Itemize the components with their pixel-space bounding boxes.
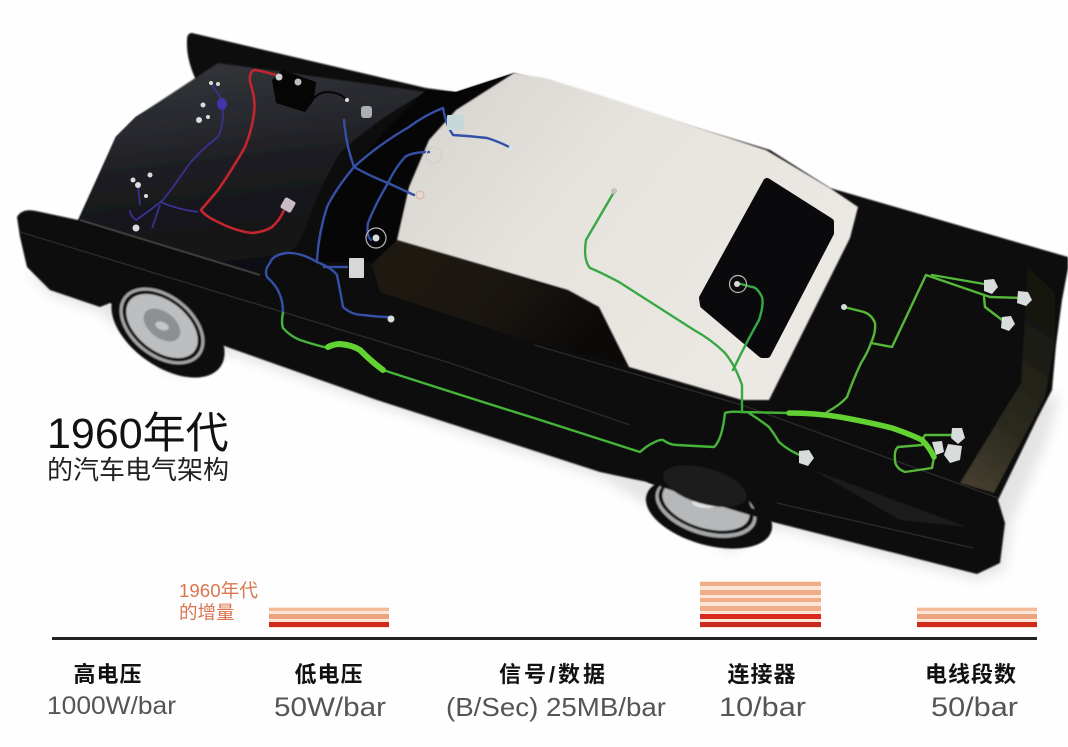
axis line — [52, 637, 1037, 640]
column: signal and data — [446, 662, 666, 722]
right rear panel — [960, 267, 1055, 493]
bars: low voltage — [269, 607, 389, 628]
rear window frame — [317, 73, 514, 262]
green harness — [282, 192, 1024, 472]
column: signal and data: 信号/数据 — [499, 662, 605, 687]
thick green trunks — [328, 344, 934, 457]
rear-left rim — [105, 272, 219, 380]
title line 1: 1960年代 — [47, 410, 229, 458]
side window glass — [372, 240, 627, 365]
illustration: 1960s car with wiring — [17, 33, 1068, 580]
legend note: 1960s amount: 1960年代 — [179, 580, 259, 601]
bars: wire segments — [917, 607, 1037, 628]
column: low voltage: 50W/bar — [274, 692, 386, 722]
column: signal and data: (B/Sec) 25MB/bar — [446, 692, 666, 722]
column: connectors: 10/bar — [719, 692, 806, 722]
rear window — [703, 182, 830, 354]
rear-left wheel — [94, 263, 242, 397]
bars: connectors — [700, 581, 821, 628]
connectors — [130, 81, 1032, 466]
white roof — [397, 73, 858, 400]
column: low voltage: 低电压 — [294, 662, 364, 687]
column: high voltage: 高电压 — [73, 662, 143, 687]
column: connectors — [719, 662, 806, 722]
red wire — [201, 70, 284, 233]
title line 2: 的汽车电气架构 — [47, 455, 229, 485]
front-right wheel arch — [647, 467, 773, 522]
title — [47, 410, 229, 485]
dark blue trunk wire — [130, 83, 227, 228]
battery — [272, 70, 349, 112]
highlight rings — [366, 147, 746, 292]
rear-left tire — [94, 263, 242, 397]
body side lines — [20, 220, 998, 548]
column: wire segments: 50/bar — [931, 692, 1018, 722]
column: wire segments: 电线段数 — [925, 662, 1017, 687]
front-right tire — [638, 464, 780, 562]
legend note: 1960s amount — [179, 580, 259, 623]
column: high voltage: 1000W/bar — [47, 692, 176, 720]
column: connectors: 连接器 — [727, 662, 797, 687]
front-right wheel — [638, 457, 780, 562]
front-right rim — [648, 465, 764, 549]
column: low voltage — [274, 662, 386, 722]
trunk lid panel — [80, 63, 426, 273]
blue wires — [266, 108, 511, 317]
legend note: 1960s amount: 的增量 — [179, 602, 235, 623]
column: high voltage — [47, 662, 176, 720]
car body silhouette — [17, 33, 1068, 574]
car shadow — [27, 270, 1060, 580]
column: wire segments — [925, 662, 1018, 722]
